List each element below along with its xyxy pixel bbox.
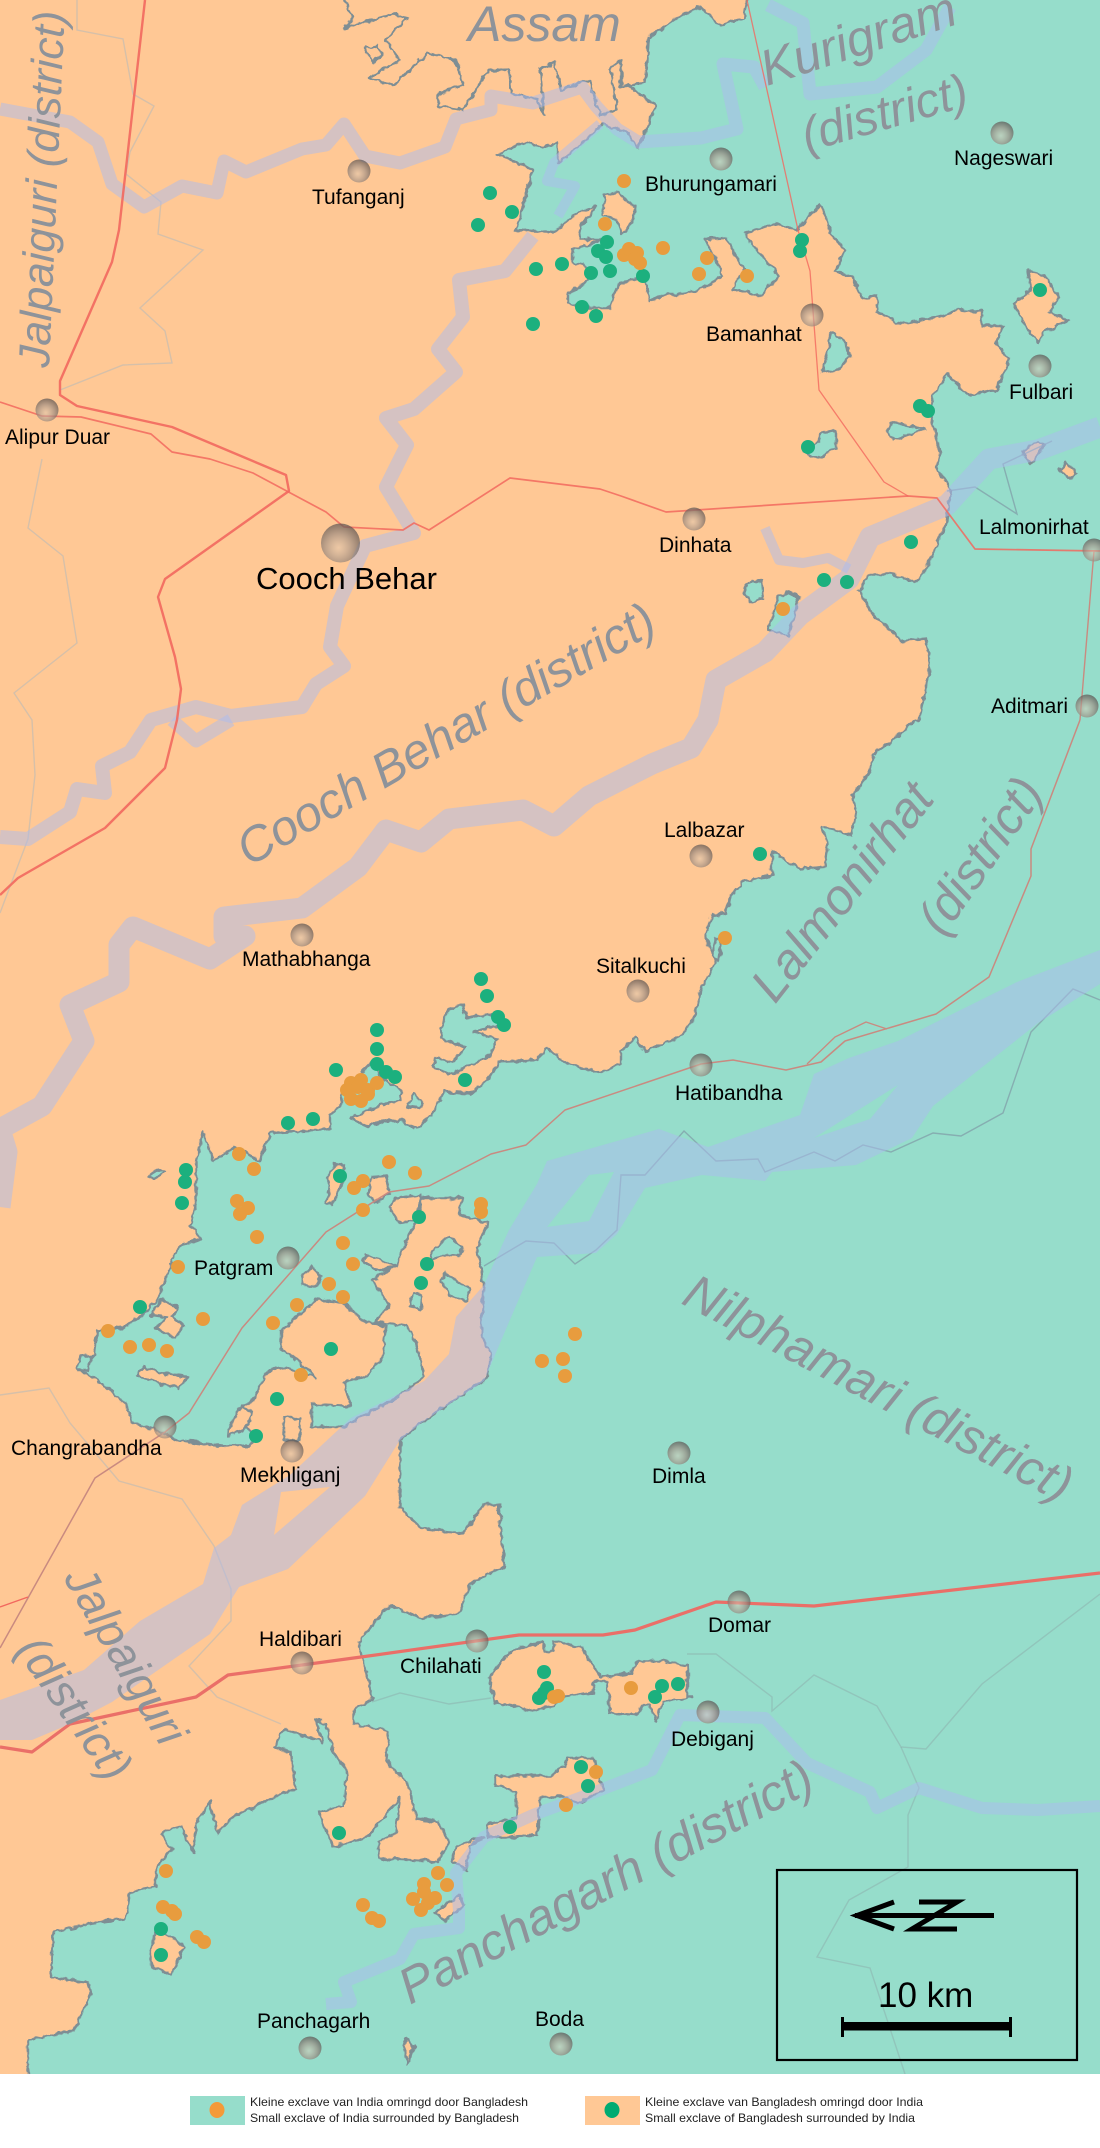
road: Aditmari to Changrabandha [0,720,1080,1648]
scale and north arrow box [777,1870,1077,2060]
legend: India exclave text: Small exclave of India surrounded by Bangladesh [250,2111,519,2125]
label: (district) Kurigram: (district) [795,65,974,163]
town: Alipur Duar: Alipur Duar [5,426,110,449]
town: Panchagarh: Panchagarh [257,2010,370,2033]
legend: Bangladesh exclave text: Kleine exclave van Bangladesh omringd door India [645,2095,923,2109]
green dots: Bangladesh exclaves in India [133,186,1047,1962]
town: Bhurungamari: Bhurungamari [645,173,777,196]
town: Changrabandha: Changrabandha [11,1437,162,1460]
town: Bamanhat: Bamanhat [706,323,802,346]
town: Fulbari: Fulbari [1009,381,1073,404]
town: Dimla [652,1442,706,1488]
town: Domar [708,1590,771,1637]
river: Teesta wide band [0,950,1100,1740]
legend: India exclave text [250,2095,528,2125]
town: Boda [535,2008,584,2056]
scale label: 10 km: 10 km [878,1976,973,2015]
town: Lalmonirhat: Lalmonirhat [979,516,1089,539]
legend: Bangladesh exclave text: Small exclave of Bangladesh surrounded by India [645,2111,915,2125]
town: Aditmari: Aditmari [991,695,1068,718]
scale bar [841,2017,1012,2037]
town: Alipur Duar [5,398,110,449]
label: Cooch Behar (district): Cooch Behar (district) [228,593,665,877]
road: Jalpaiguri stub [0,1597,28,1607]
town: Mathabhanga [242,924,371,971]
town: Debiganj: Debiganj [671,1728,754,1751]
label: Nilphamari (district): Nilphamari (district) [675,1263,1082,1513]
town: Patgram [194,1246,300,1280]
label: Jalpaiguri (district) north: Jalpaiguri (district) [10,10,75,369]
label: Lalmonirhat: Lalmonirhat [740,770,946,1012]
town: Haldibari: Haldibari [259,1628,342,1651]
town: Lalbazar [664,819,745,868]
label: Jalpaiguri south: Jalpaiguri [54,1556,199,1755]
legend area [0,2074,1100,2148]
legend: Bangladesh exclave swatch [585,2096,640,2125]
town: Haldibari [259,1628,342,1674]
town: Sitalkuchi: Sitalkuchi [596,955,686,978]
town: Nageswari: Nageswari [954,147,1053,170]
road: north-south Bamanhat [747,0,908,496]
town: Bhurungamari [645,148,777,196]
road: Cooch Behar to Lalmonirhat [0,402,1100,551]
river: central channel side loop [172,720,231,741]
town: Dimla: Dimla [652,1465,706,1488]
river: Kurigram channel [768,5,950,94]
town: Cooch Behar: Cooch Behar [256,561,437,596]
town: Chilahati: Chilahati [400,1655,482,1678]
road: Lalmonirhat to Aditmari [1080,551,1094,720]
river: northern channel [0,64,765,207]
river: Dharla main band [0,427,1100,1207]
town: Mekhliganj [240,1440,340,1487]
road: Alipur Duar to Cooch Behar [0,0,289,895]
railway: Haldibari to Domar [0,1573,1100,1752]
town: Dinhata [659,508,732,557]
legend: Bangladesh exclave text [645,2095,923,2125]
river: Dinhata branch [765,528,849,569]
town: Cooch Behar [256,524,437,596]
legend: India exclave text: Kleine exclave van India omringd door Bangladesh [250,2095,528,2109]
town: Lalbazar: Lalbazar [664,819,745,842]
orange exclaves inside Bangladesh [138,193,1077,2064]
town: Debiganj [671,1700,754,1751]
label: Panchagarh (district): Panchagarh (district) [389,1749,822,2015]
town: Panchagarh [257,2010,370,2060]
town: Sitalkuchi [596,955,686,1002]
Assam state border [344,0,628,115]
town: Nageswari [954,122,1053,170]
town: Tufanganj [312,160,405,209]
teal exclaves inside India [77,332,925,1370]
river: central channel [0,236,533,839]
river: side branch near Bhurungamari [547,124,600,216]
town: Patgram: Patgram [194,1257,273,1280]
town: Mathabhanga: Mathabhanga [242,948,371,971]
town: Tufanganj: Tufanganj [312,186,405,209]
river: southern channel [326,1715,1100,2004]
town: Chilahati [400,1630,488,1678]
label: (district) Jalpaiguri south: (district) [7,1626,143,1790]
label: (district) Lalmonirhat: (district) [906,767,1054,944]
town: Hatibandha: Hatibandha [675,1082,783,1105]
town: Fulbari [1009,354,1073,404]
town: Boda: Boda [535,2008,584,2031]
road: Hatibandha branch [807,1022,887,1064]
town: Bamanhat [706,304,824,346]
icon: north arrow [855,1902,994,1929]
town: Lalmonirhat [979,516,1100,562]
town: Dinhata: Dinhata [659,534,732,557]
town: Changrabandha [11,1416,176,1460]
legend: India exclave swatch [190,2096,245,2125]
town: Hatibandha [675,1054,783,1105]
town: Domar: Domar [708,1614,771,1637]
town: Mekhliganj: Mekhliganj [240,1464,340,1487]
orange dots: India exclaves in Bangladesh [101,174,790,1949]
